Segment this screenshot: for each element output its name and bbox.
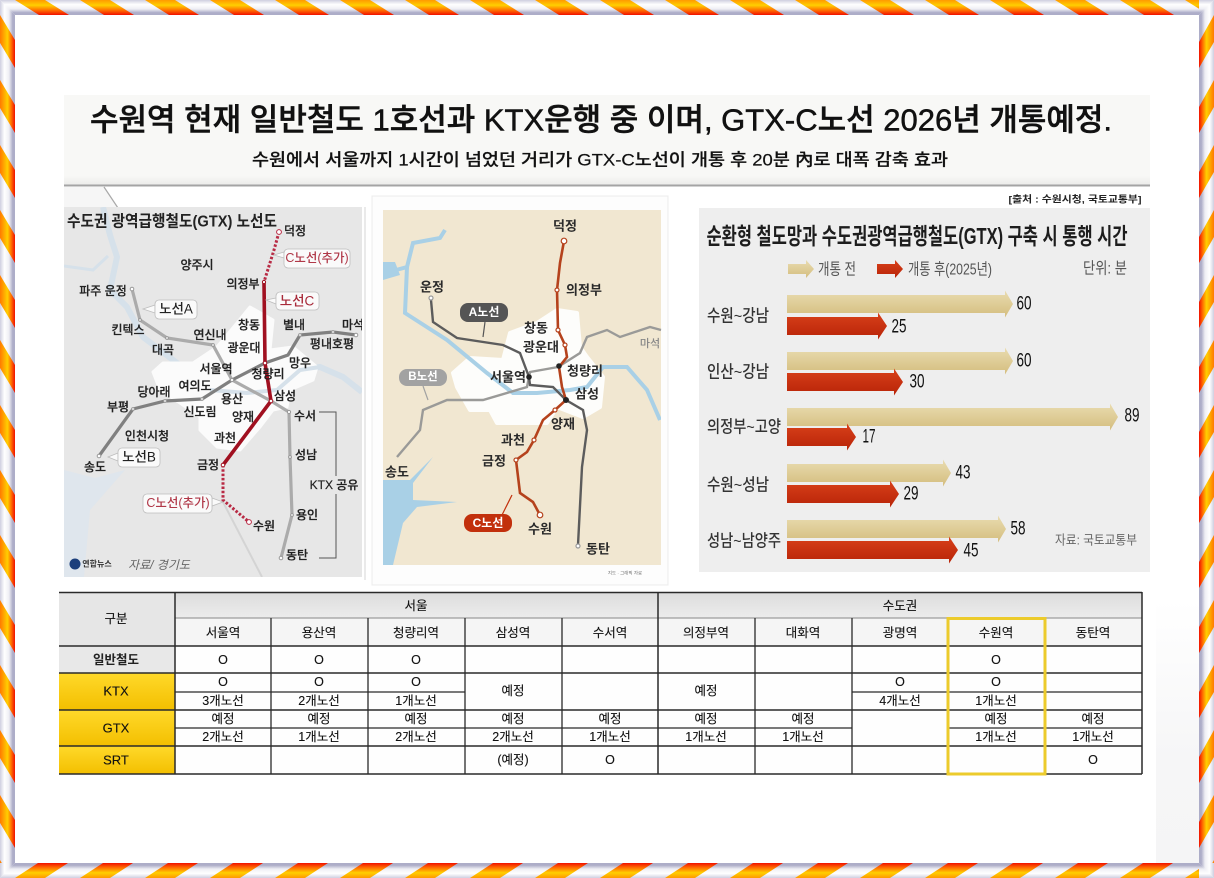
station labels: 평내호평 xyxy=(310,337,354,351)
callouts: C노선(추가) xyxy=(146,496,210,510)
route labels xyxy=(707,306,781,550)
station labels: 망우 xyxy=(289,356,311,370)
after-opening arrows xyxy=(787,312,958,564)
value labels: 58 xyxy=(1010,518,1026,540)
table values: 예정 xyxy=(307,712,331,726)
panel: beige route map xyxy=(372,196,668,585)
line C solid xyxy=(223,282,271,465)
table values: 1개노선 xyxy=(1072,730,1114,744)
value labels: 89 xyxy=(1124,406,1140,426)
station labels: 파주 운정 xyxy=(79,284,127,298)
station labels: 동탄 xyxy=(286,548,308,562)
title: 수원역 현재 일반철도 1호선과 KTX운행 중 이며, GTX-C노선 2026년 개통예정. xyxy=(90,102,1112,138)
table values: 예정 xyxy=(791,712,815,726)
value labels: 17 xyxy=(862,426,876,448)
line badges xyxy=(399,303,512,532)
station labels: 광운대 xyxy=(523,340,559,354)
station labels xyxy=(385,218,660,556)
table values: O xyxy=(218,653,228,667)
subtitle: 수원에서 서울까지 1시간이 넘었던 거리가 GTX-C노선이 개통 후 20분 內로 대폭 감축 효과 xyxy=(252,150,948,170)
station labels: 의정부 xyxy=(226,277,260,291)
legend: 단위: 분 xyxy=(1083,260,1127,278)
table values: 1개노선 xyxy=(782,730,824,744)
KTX shared bracket xyxy=(319,412,336,558)
station labels: 용인 xyxy=(296,508,318,522)
station labels: 삼성 xyxy=(274,389,296,403)
table values: 예정 xyxy=(1081,712,1105,726)
station names: 의정부역 xyxy=(683,626,729,640)
table values: 2개노선 xyxy=(395,730,437,744)
station labels: 별내 xyxy=(283,318,305,332)
table values: 1개노선 xyxy=(395,694,437,708)
table values: 1개노선 xyxy=(685,730,727,744)
station labels: 성남 xyxy=(295,448,317,462)
value labels: 30 xyxy=(910,372,924,392)
station names: 수원역 xyxy=(979,626,1013,640)
table values: 1개노선 xyxy=(298,730,340,744)
table values: O xyxy=(991,653,1001,667)
route labels: 인산~강남 xyxy=(707,362,769,382)
value labels xyxy=(862,294,1140,562)
station names: 동탄역 xyxy=(1076,626,1110,640)
station labels: 대곡 xyxy=(152,343,174,357)
row and group headers: KTX xyxy=(103,684,129,698)
station labels: 양재 xyxy=(551,416,575,432)
line A xyxy=(132,289,292,558)
station labels: 용산 xyxy=(221,392,243,406)
station labels: 신도림 xyxy=(183,405,217,419)
station labels: 청량리 xyxy=(251,366,285,381)
station labels: 광운대 xyxy=(227,341,261,355)
table values: 예정 xyxy=(598,712,622,726)
station labels: 과천 xyxy=(214,430,236,445)
station names: 용산역 xyxy=(302,626,336,640)
station labels: 연신내 xyxy=(193,328,227,342)
table values: 예정 xyxy=(694,712,718,726)
callouts xyxy=(108,249,350,513)
line badges: B노선 xyxy=(408,370,438,383)
table values: 1개노선 xyxy=(975,694,1017,708)
line C xyxy=(516,241,567,515)
station labels: 수원 xyxy=(253,519,275,533)
value labels: 60 xyxy=(1016,294,1032,314)
panel: travel time bar chart xyxy=(699,208,1150,572)
station labels: 부평 xyxy=(107,400,129,414)
row and group headers: 수도권 xyxy=(883,599,917,613)
line badges: A노선 xyxy=(469,305,499,319)
route labels: 수원~강남 xyxy=(707,306,769,326)
station labels: 덕정 xyxy=(553,218,577,234)
station labels: 동탄 xyxy=(586,542,610,556)
station labels: 송도 xyxy=(385,464,409,480)
station labels: 마석 xyxy=(342,318,364,332)
value labels: 43 xyxy=(956,462,970,484)
station labels: 수원 xyxy=(528,522,552,536)
table: station comparison xyxy=(59,592,1142,774)
row and group headers: 일반철도 xyxy=(93,653,139,667)
source note: [출처 : 수원시청, 국토교통부] xyxy=(1008,194,1142,206)
logo and source xyxy=(70,558,191,572)
table values: O xyxy=(605,753,615,767)
map heading: 수도권 광역급행철도(GTX) 노선도 xyxy=(67,212,277,230)
header band xyxy=(64,95,1150,208)
table values: 4개노선 xyxy=(879,694,921,708)
station labels: KTX 공유 xyxy=(310,478,358,492)
table values: O xyxy=(411,653,421,667)
callouts: 노선A xyxy=(159,302,193,316)
callouts: 노선C xyxy=(280,294,315,308)
station names: 대화역 xyxy=(786,626,820,640)
line B xyxy=(99,332,356,456)
legend: 개통 전 xyxy=(818,260,856,278)
table values xyxy=(202,653,1114,767)
line badges: C노선 xyxy=(473,516,503,530)
route labels: 의정부~고양 xyxy=(707,418,781,436)
table values: 3개노선 xyxy=(202,694,244,708)
station labels: 서울역 xyxy=(199,362,233,376)
line A xyxy=(431,300,587,545)
station labels: 창동 xyxy=(524,320,548,336)
station labels: 마석 xyxy=(640,337,660,350)
table values: 1개노선 xyxy=(589,730,631,744)
small map credit: 지도 · 그래픽 자료 xyxy=(608,570,642,576)
station labels: 양재 xyxy=(232,409,254,424)
table values: 1개노선 xyxy=(975,730,1017,744)
station labels: 금정 xyxy=(197,458,219,472)
station labels xyxy=(79,224,364,562)
station labels: 청량리 xyxy=(567,364,603,378)
table values: 예정 xyxy=(501,684,525,698)
row and group headers: SRT xyxy=(103,752,129,768)
station labels: 당아래 xyxy=(137,385,171,399)
legend xyxy=(788,260,1127,278)
station labels: 의정부 xyxy=(566,282,602,298)
table values: 예정 xyxy=(694,684,718,698)
logo and source: 연합뉴스 xyxy=(82,558,112,568)
table values: O xyxy=(991,675,1001,689)
table values: 예정 xyxy=(984,712,1008,726)
station labels: 운정 xyxy=(420,280,444,294)
table values: 2개노선 xyxy=(492,730,534,744)
value labels: 29 xyxy=(904,484,918,504)
table values: 예정 xyxy=(404,712,428,726)
station labels: 삼성 xyxy=(575,386,599,402)
station labels: 송도 xyxy=(84,460,106,474)
table values: 2개노선 xyxy=(202,730,244,744)
route labels: 수원~성남 xyxy=(707,476,769,494)
chart source: 자료: 국토교통부 xyxy=(1055,532,1137,548)
station names: 청량리역 xyxy=(393,626,439,640)
value labels: 60 xyxy=(1016,350,1032,372)
before-opening arrows xyxy=(787,290,1118,542)
table values: O xyxy=(895,675,905,689)
row and group headers: 구분 xyxy=(104,612,128,626)
station labels: 금정 xyxy=(482,454,506,468)
table values: O xyxy=(411,675,421,689)
station labels: 덕정 xyxy=(284,224,306,238)
callouts: 노선B xyxy=(122,450,156,464)
station names xyxy=(206,626,1110,640)
row and group headers: GTX xyxy=(103,720,130,736)
station labels: 수서 xyxy=(294,409,316,423)
table grid xyxy=(59,592,1142,774)
station labels: 킨텍스 xyxy=(111,323,145,337)
station labels: 과천 xyxy=(501,432,525,448)
table values: O xyxy=(1088,753,1098,767)
line C dotted extensions xyxy=(223,232,279,522)
legend: 개통 후(2025년) xyxy=(908,260,992,278)
panel: GTX route map (grey) xyxy=(64,207,365,580)
station labels: 서울역 xyxy=(490,370,526,384)
table values: (예정) xyxy=(497,753,529,767)
value labels: 25 xyxy=(892,316,906,338)
station markers xyxy=(429,238,580,548)
logo and source: 자료/ 경기도 xyxy=(128,558,191,572)
table values: 예정 xyxy=(211,712,235,726)
station labels: 창동 xyxy=(238,318,260,332)
station labels: 인천시청 xyxy=(125,428,169,443)
table values: O xyxy=(314,653,324,667)
station names: 광명역 xyxy=(883,626,917,640)
callouts: C노선(추가) xyxy=(285,251,349,265)
station names: 서울역 xyxy=(206,626,240,640)
station labels: 여의도 xyxy=(178,379,212,393)
line B xyxy=(397,327,661,457)
row and group headers xyxy=(93,599,917,768)
station names: 수서역 xyxy=(593,626,627,640)
station names: 삼성역 xyxy=(496,626,530,640)
station labels: 양주시 xyxy=(180,258,214,272)
table values: 2개노선 xyxy=(298,694,340,708)
table values: O xyxy=(218,675,228,689)
background tint at lower right xyxy=(1156,600,1199,863)
value labels: 45 xyxy=(964,540,978,562)
table values: O xyxy=(314,675,324,689)
station markers xyxy=(97,230,358,560)
highlight: Suwon station column xyxy=(948,618,1045,774)
table fills xyxy=(59,592,1142,774)
table values: 예정 xyxy=(501,712,525,726)
route labels: 성남~남양주 xyxy=(707,532,781,550)
row and group headers: 서울 xyxy=(404,599,428,613)
